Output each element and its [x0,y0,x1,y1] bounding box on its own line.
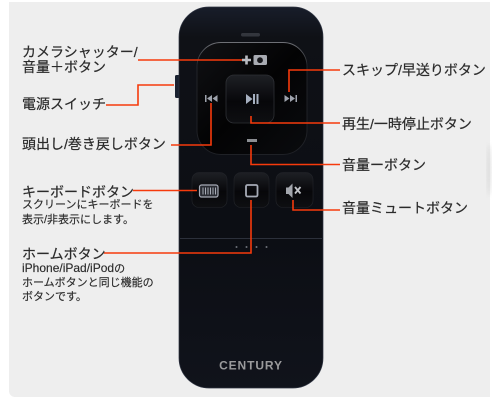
description: keyboard button [22,198,153,226]
label: mute: 音量ミュートボタン [342,200,468,216]
callout leader lines [104,60,340,253]
label: power switch: 電源スイッチ [22,96,106,112]
description: keyboard button: 表示/非表示にします。 [22,214,134,226]
description: home button: ホームボタンと同じ機能の [22,277,154,289]
label: camera shutter and volume plus: カメラシャッター/ [22,44,138,60]
icon: fast forward [284,95,297,102]
icon: keyboard [200,185,218,197]
play pause center button [226,75,274,123]
icon: camera [254,55,267,65]
seam line [180,238,322,240]
remote body [179,7,323,388]
speaker slot [241,33,260,36]
label: play pause: 再生/一時停止ボタン [342,116,472,132]
description: keyboard button: スクリーンにキーボードを [22,199,153,211]
label: skip and fast forward: スキップ/早送りボタン [342,62,486,78]
keyboard button [192,172,227,208]
icon: mute speaker [286,184,300,198]
label: volume minus: 音量ーボタン [342,157,426,173]
d-pad [197,42,307,154]
label: camera shutter and volume plus: 音量＋ボタン [22,59,106,75]
description: home button: ボタンです。 [22,291,87,303]
description: home button: iPhone/iPad/iPodの [22,261,125,275]
label: camera shutter and volume plus [22,44,138,75]
home button [234,172,269,208]
side power button [175,75,180,98]
label: home button: ホームボタン [22,246,106,262]
label: keyboard button: キーボードボタン [22,184,134,200]
icon: volume plus [242,56,251,64]
mute button [276,172,313,208]
brand logo: CENTURY [219,358,283,372]
description: home button [22,261,154,303]
icon: home [246,185,258,196]
icon: rewind [205,95,218,102]
label: rewind: 頭出し/巻き戻しボタン [22,136,166,152]
icon: play pause [246,94,258,104]
icon: volume minus [247,139,257,142]
indicator dots [236,246,268,248]
smudge on right edge [488,144,490,196]
